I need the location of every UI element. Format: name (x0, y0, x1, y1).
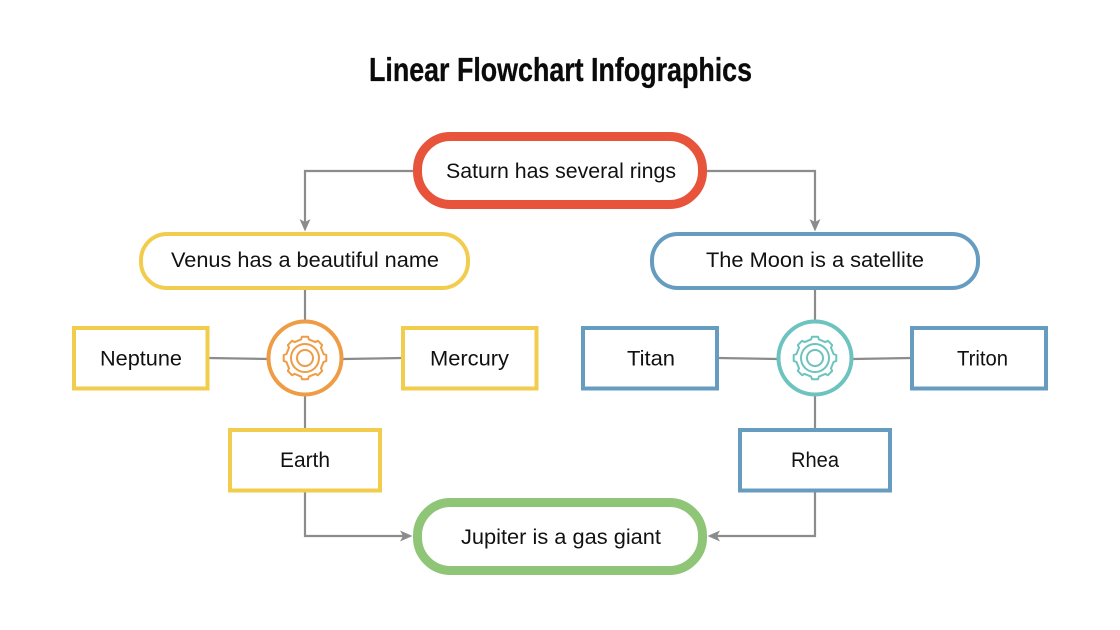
box: Neptune (74, 328, 208, 388)
icon: orange gear (268, 322, 342, 394)
node: Jupiter: Jupiter is a gas giant (461, 525, 661, 549)
node: Saturn (418, 136, 702, 204)
title: Linear Flowchart Infographics (369, 51, 752, 88)
box: Rhea: Rhea (791, 448, 839, 472)
box: Earth (230, 430, 380, 490)
node: Saturn: Saturn has several rings (446, 159, 676, 183)
icon: teal gear (778, 322, 852, 394)
box: Mercury (403, 328, 536, 388)
node: The Moon (652, 234, 978, 288)
box: Rhea (740, 430, 890, 490)
box: Mercury: Mercury (430, 346, 509, 370)
connectors: right branch (706, 171, 912, 542)
node: The Moon: The Moon is a satellite (706, 248, 924, 272)
connectors: left branch (208, 171, 414, 542)
box: Triton (912, 328, 1046, 388)
node: Venus (141, 234, 468, 288)
box: Titan: Titan (627, 346, 675, 370)
box: Neptune: Neptune (100, 346, 182, 370)
box: Triton: Triton (957, 346, 1008, 370)
node: Jupiter (418, 502, 702, 570)
box: Titan (583, 328, 717, 388)
node: Venus: Venus has a beautiful name (171, 248, 439, 272)
box: Earth: Earth (280, 448, 330, 472)
